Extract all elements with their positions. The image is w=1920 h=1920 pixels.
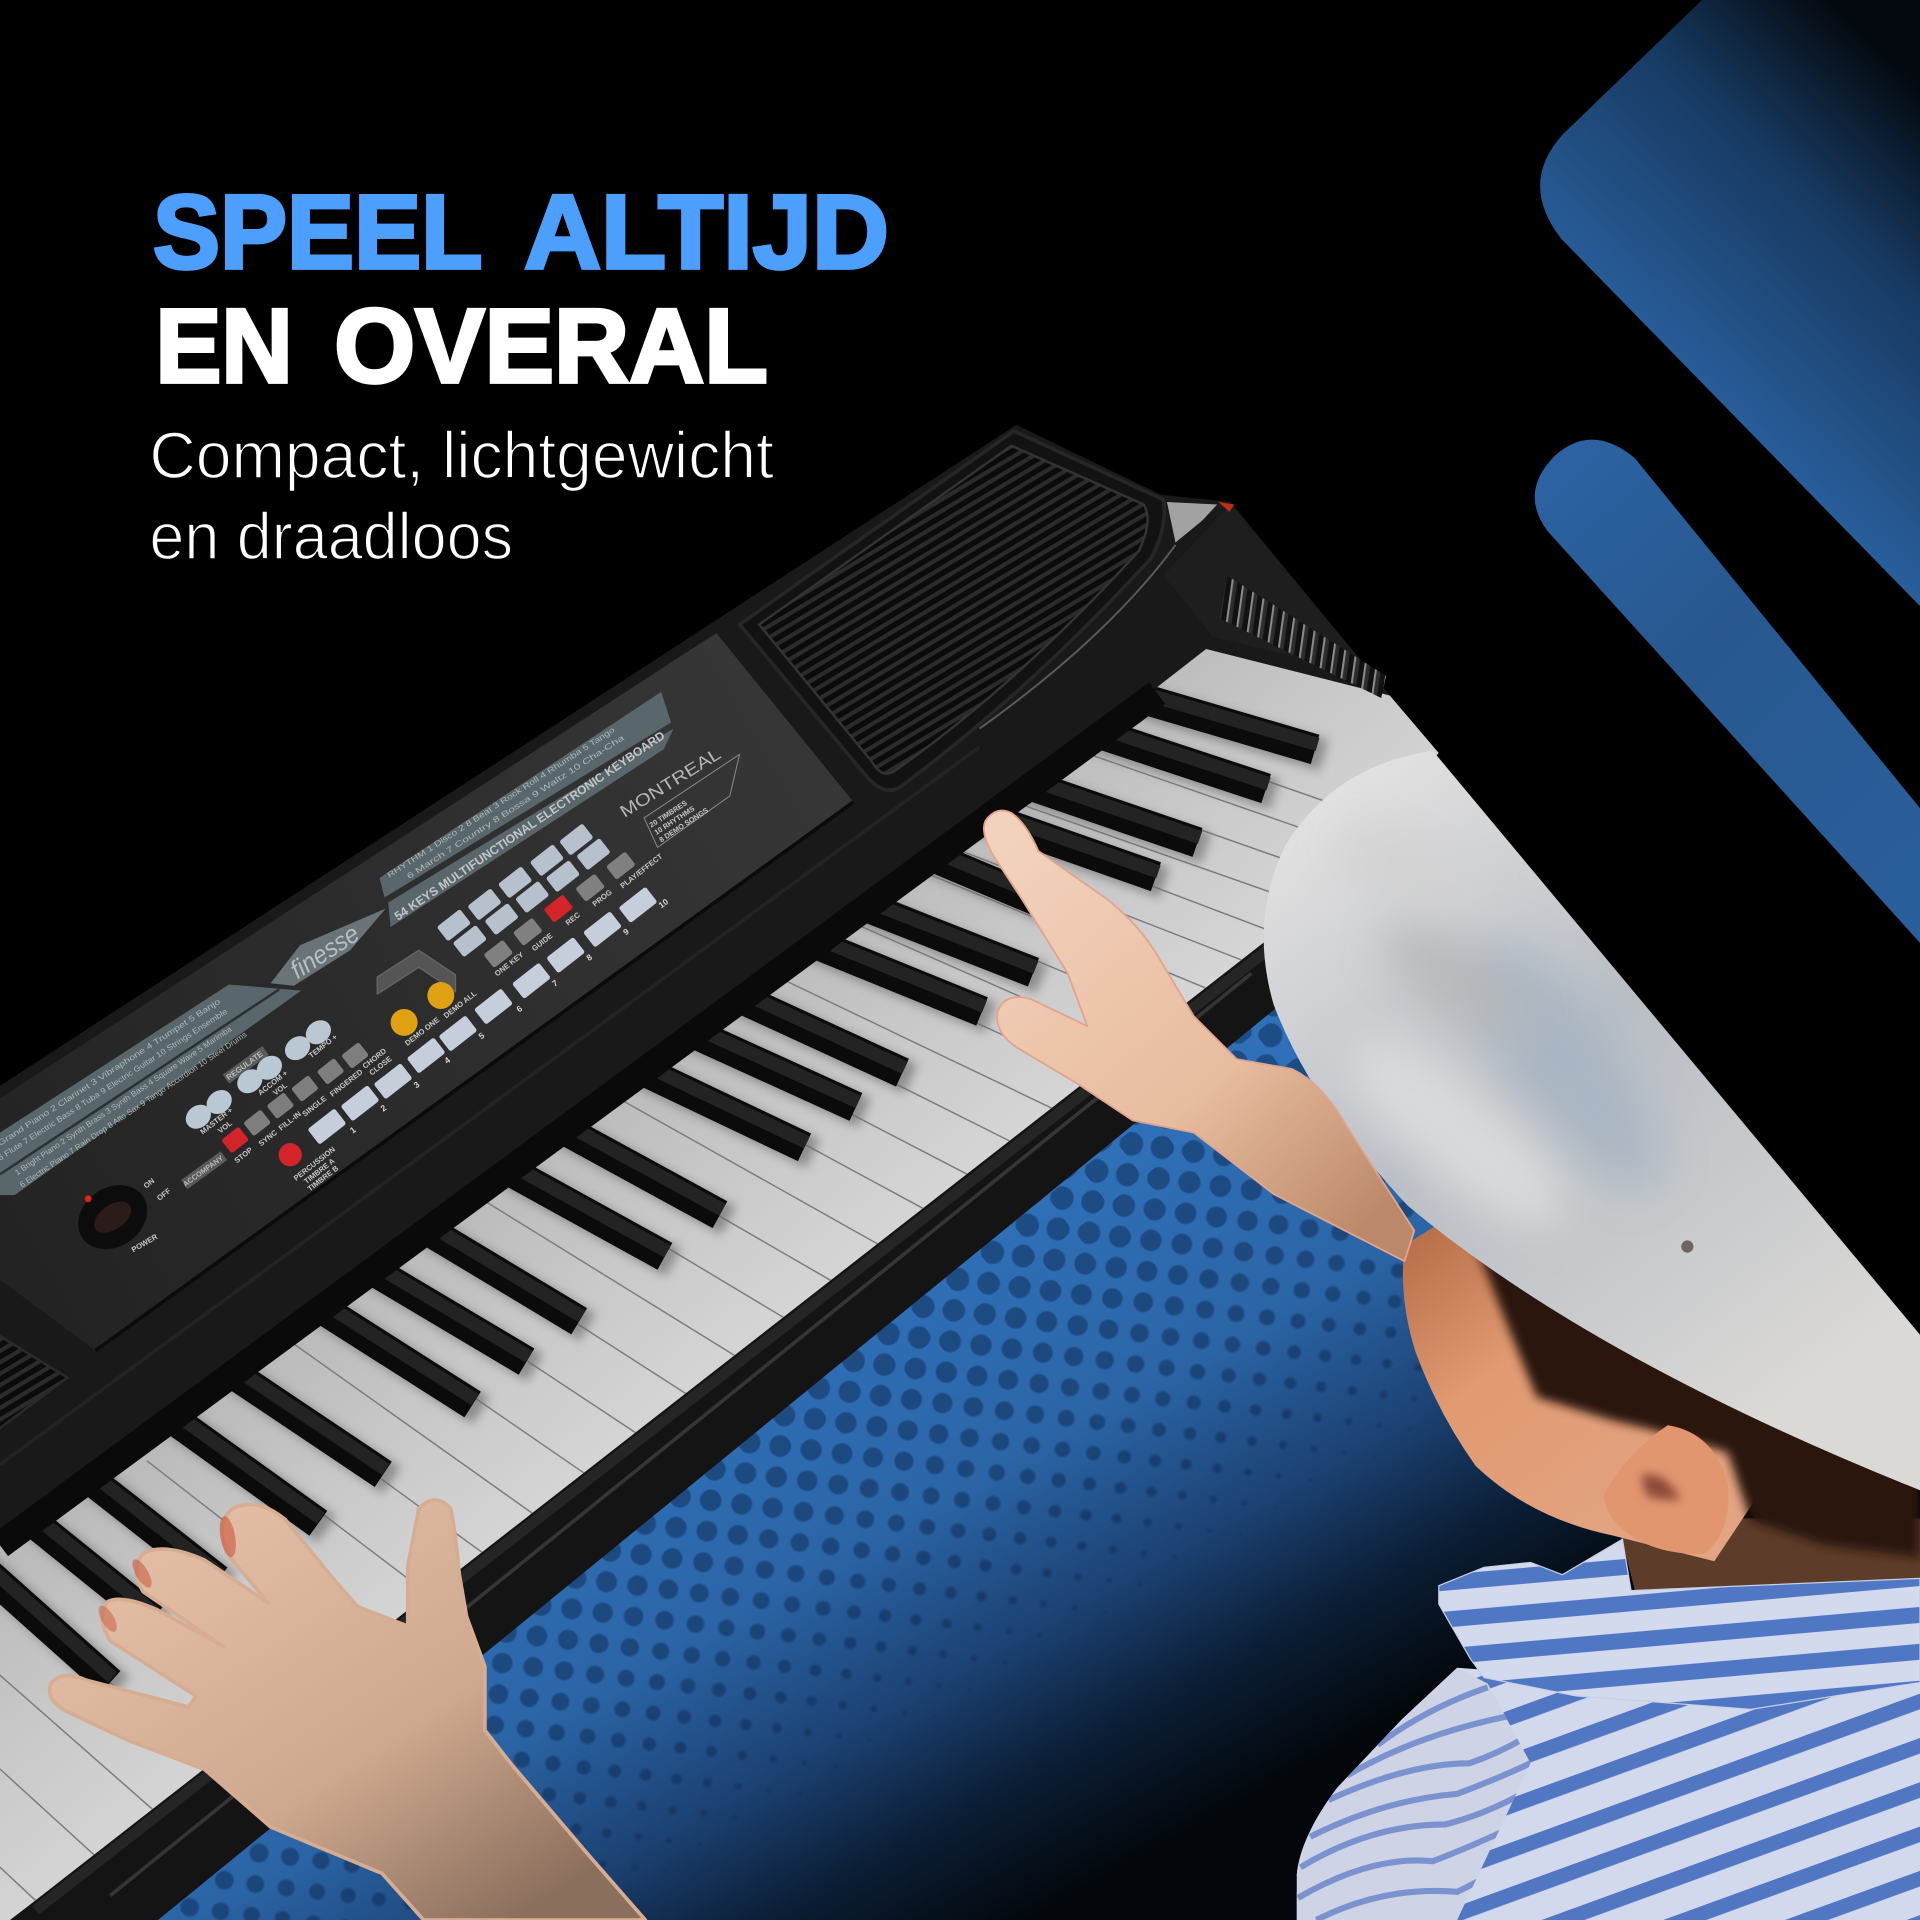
decorative blue rounded shape top right bbox=[1540, 0, 1920, 606]
rhythm label band bbox=[380, 692, 671, 898]
song numbers: 5 bbox=[477, 1030, 486, 1041]
timbre label bands: 1 Bright Piano 2 Synth Brass 3 Synth Bass 4 Square Wave 5 Marimba bbox=[13, 1024, 234, 1177]
decorative blue capsule bar bbox=[1535, 440, 1920, 943]
song selection buttons bbox=[307, 887, 657, 1145]
song numbers: 2 bbox=[379, 1102, 388, 1113]
button captions: TIMBRE B bbox=[306, 1163, 341, 1193]
product name band: 54 KEYS MULTIFUNCTIONAL ELECTRONIC KEYBOARD bbox=[392, 728, 668, 923]
rhythm label band: RHYTHM 1 Disco 2 8 Beat 3 Rock Roll 4 Rhumba 5 Tango bbox=[386, 725, 617, 880]
power switch bbox=[66, 1172, 160, 1262]
control plate bbox=[0, 633, 853, 1351]
timbre label bands: 6 Flute 7 Electric Bass 8 Tuba 9 Electric Guitar 10 Strings Ensemble bbox=[0, 1007, 230, 1162]
button captions: ONE KEY bbox=[493, 950, 525, 978]
song numbers: 4 bbox=[442, 1055, 452, 1066]
button captions: DEMO ALL bbox=[442, 989, 479, 1020]
fascia ridge bbox=[0, 504, 1374, 1545]
subtitle: Compact, lichtgewicht bbox=[149, 419, 774, 493]
song numbers: 1 bbox=[348, 1124, 358, 1135]
regulate and accompany tags: ACCOMPANY bbox=[181, 1153, 225, 1189]
title line 2 word 2: OVERAL bbox=[334, 288, 768, 405]
button captions: VOL bbox=[271, 1080, 289, 1097]
button captions: ON bbox=[142, 1176, 156, 1190]
song numbers: 3 bbox=[412, 1079, 422, 1090]
white keys bbox=[0, 612, 1457, 1920]
button captions: STOP bbox=[233, 1145, 254, 1165]
timbre label bands: Grand Piano 2 Clarinet 3 Vibraphone 4 Trumpet 5 Banjo bbox=[0, 996, 223, 1148]
function buttons bbox=[221, 851, 636, 1154]
button captions: SINGLE bbox=[300, 1094, 328, 1118]
button captions: REC bbox=[564, 910, 582, 927]
boy ear bbox=[1604, 1425, 1728, 1554]
boy neck bbox=[1616, 1518, 1920, 1594]
Montreal badge: MONTREAL bbox=[616, 743, 724, 821]
lower hand on keys bbox=[50, 1500, 645, 1920]
button captions: PLAY/EFFECT bbox=[618, 852, 665, 890]
boy shirt bbox=[1286, 1659, 1920, 1920]
title line 2 word 1: EN bbox=[156, 288, 293, 405]
left speaker grille bbox=[0, 1332, 67, 1433]
subtitle bbox=[149, 419, 774, 574]
boy head bbox=[1403, 1212, 1776, 1561]
title line 1 word 2: ALTIJD bbox=[524, 174, 889, 291]
button captions: DEMO ONE bbox=[403, 1015, 441, 1048]
keyboard body bbox=[0, 425, 1390, 1550]
Montreal badge: 20 TIMBRES bbox=[648, 798, 689, 829]
button captions: CHORD bbox=[361, 1046, 389, 1071]
Montreal badge bbox=[616, 743, 740, 847]
song numbers: 8 bbox=[584, 952, 594, 963]
button captions: ACCOM + bbox=[256, 1068, 290, 1097]
subtitle: en draadloos bbox=[149, 500, 513, 574]
button captions: FINGERED bbox=[328, 1067, 365, 1099]
finesse logo band: finesse bbox=[286, 920, 364, 985]
timbre label bands: 6 Electric Piano 7 Rain Drop 8 Alto Sax 9 Tango Accordion 10 Steel Drums bbox=[18, 1030, 249, 1189]
regulate and accompany tags: REGULATE bbox=[225, 1049, 265, 1082]
song numbers bbox=[348, 896, 670, 1135]
button captions: POWER bbox=[130, 1232, 160, 1254]
button captions: CLOSE bbox=[367, 1054, 394, 1077]
boy shirt collar bbox=[1439, 1539, 1920, 1709]
black keys bbox=[0, 675, 1318, 1682]
volume and tempo buttons bbox=[181, 1015, 336, 1134]
button captions: GUIDE bbox=[530, 931, 554, 953]
finesse logo band bbox=[271, 909, 386, 986]
regulate and accompany tags bbox=[181, 1046, 269, 1189]
title line 1 word 1: SPEEL bbox=[153, 174, 482, 291]
button captions: TIMBRE A bbox=[302, 1156, 337, 1186]
song numbers: 9 bbox=[621, 926, 631, 937]
boy cap bbox=[1264, 751, 1920, 1490]
song numbers: 6 bbox=[514, 1003, 524, 1014]
button captions: OFF bbox=[155, 1186, 173, 1203]
rhythm label band: 6 March 7 Country 8 Bossa 9 Waltz 10 Cha-Cha bbox=[405, 733, 626, 881]
title bbox=[153, 174, 889, 405]
upper hand on keys bbox=[984, 811, 1414, 1261]
button captions: MASTER + bbox=[198, 1105, 235, 1136]
button captions: FILL-IN bbox=[277, 1109, 303, 1132]
button captions: SYNC bbox=[257, 1128, 279, 1148]
button captions: PERCUSSION bbox=[292, 1145, 337, 1183]
button captions: PROG bbox=[591, 888, 614, 908]
keyboard front rail bbox=[0, 924, 1300, 1920]
right speaker grille bbox=[740, 431, 1164, 790]
Montreal badge: 10 RHYTHMS bbox=[653, 804, 696, 837]
corner highlight bbox=[1167, 502, 1217, 542]
Montreal badge: 8 DEMO SONGS bbox=[657, 806, 710, 844]
button captions: VOL bbox=[216, 1118, 234, 1135]
timbre label bands bbox=[0, 984, 301, 1195]
red corner sliver bbox=[1218, 502, 1234, 512]
song numbers: 10 bbox=[657, 896, 670, 910]
button captions: TEMPO + bbox=[307, 1032, 339, 1060]
demo buttons with music note bbox=[377, 950, 456, 1036]
red percussion button bbox=[279, 1143, 302, 1166]
side vent bbox=[1220, 576, 1386, 698]
timbre and rhythm button cluster bbox=[437, 823, 611, 957]
boy hair bbox=[1466, 1221, 1920, 1558]
song numbers: 7 bbox=[550, 978, 560, 989]
button captions bbox=[130, 852, 665, 1254]
blue halftone panel bbox=[158, 1008, 1748, 1920]
